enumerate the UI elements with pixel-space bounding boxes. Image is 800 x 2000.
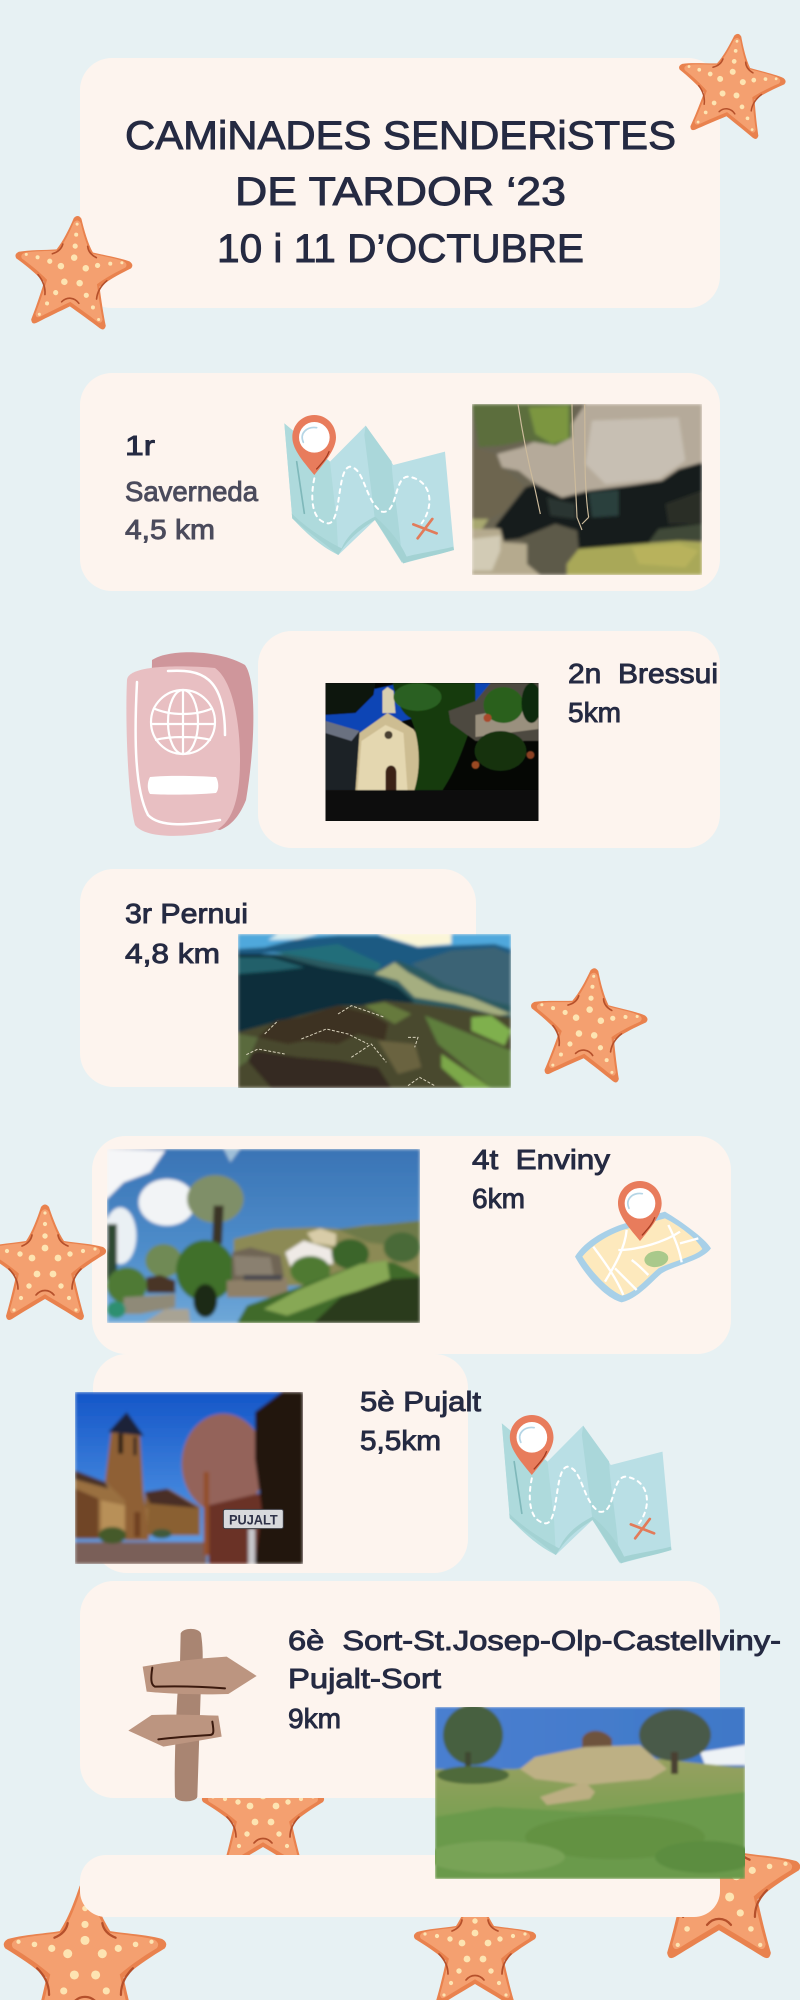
panel: stage 1 Saverneda <box>80 373 720 591</box>
panel: stage 2 Bressui <box>258 631 720 848</box>
star: behind panel six, clipped <box>202 1752 324 1868</box>
photo: chapel at Bressui <box>326 683 538 821</box>
stage 3 text: 3r Pernui <box>125 898 248 929</box>
panel: stage 3 Pernui <box>80 869 476 1087</box>
star: left of Enviny panel <box>0 1204 106 1320</box>
photo: Pernui valley and ruins <box>238 934 511 1088</box>
title: 10 i 11 D’OCTUBRE <box>217 227 584 271</box>
photo: cave at Saverneda <box>472 404 702 575</box>
star: bottom left <box>4 1883 166 2000</box>
photo: hilltop chapel and meadow <box>435 1707 745 1879</box>
stage 4 text <box>472 1144 610 1214</box>
stage 1 text: 1r <box>125 430 155 461</box>
title <box>125 114 676 271</box>
star: bottom right <box>638 1805 800 1958</box>
stage 5 text: 5è Pujalt <box>360 1386 481 1417</box>
stage 1 text <box>125 430 258 545</box>
star: beside Pernui photo <box>523 961 653 1085</box>
stage 2 text <box>568 658 718 728</box>
sign: Pujalt: PUJALT <box>229 1511 278 1527</box>
icon: wooden signpost <box>128 1629 257 1801</box>
stage 6 text: 9km <box>288 1703 341 1734</box>
stage 4 text: 6km <box>472 1183 525 1214</box>
stage 2 text: 5km <box>568 697 621 728</box>
stage 2 text: 2n Bressui <box>568 658 718 689</box>
icon: passport <box>126 652 253 836</box>
photo: Enviny village <box>107 1149 420 1323</box>
stage 5 text <box>360 1386 481 1456</box>
icon: treasure map with pin, second <box>502 1415 671 1563</box>
stage 3 text: 4,8 km <box>125 938 220 969</box>
panel: stage 5 Pujalt <box>75 1354 481 1573</box>
photo: Pujalt church and sign <box>75 1392 303 1564</box>
stage 4 text: 4t Enviny <box>472 1144 610 1175</box>
stage 6 text: Pujalt-Sort <box>288 1663 441 1694</box>
panel: bottom strip <box>80 1855 720 1917</box>
stage 1 text: Saverneda <box>125 476 258 507</box>
stage 1 text: 4,5 km <box>125 514 215 545</box>
stage 3 text <box>125 898 248 969</box>
panel: stage 4 Enviny <box>92 1136 731 1354</box>
stage 6 text <box>288 1625 781 1734</box>
title: CAMiNADES SENDERiSTES <box>125 114 676 158</box>
icon: treasure map with pin <box>284 415 454 563</box>
icon: city map with pin <box>575 1181 711 1302</box>
star: title top right <box>671 26 791 142</box>
panel: title <box>80 58 720 308</box>
stage 6 text: 6è Sort-St.Josep-Olp-Castellviny- <box>288 1625 781 1656</box>
stage 5 text: 5,5km <box>360 1425 441 1456</box>
title: DE TARDOR ‘23 <box>235 170 566 214</box>
star: title left <box>10 211 136 332</box>
panel: stage 6 route <box>80 1581 720 1801</box>
star: bottom centre <box>414 1890 536 2000</box>
